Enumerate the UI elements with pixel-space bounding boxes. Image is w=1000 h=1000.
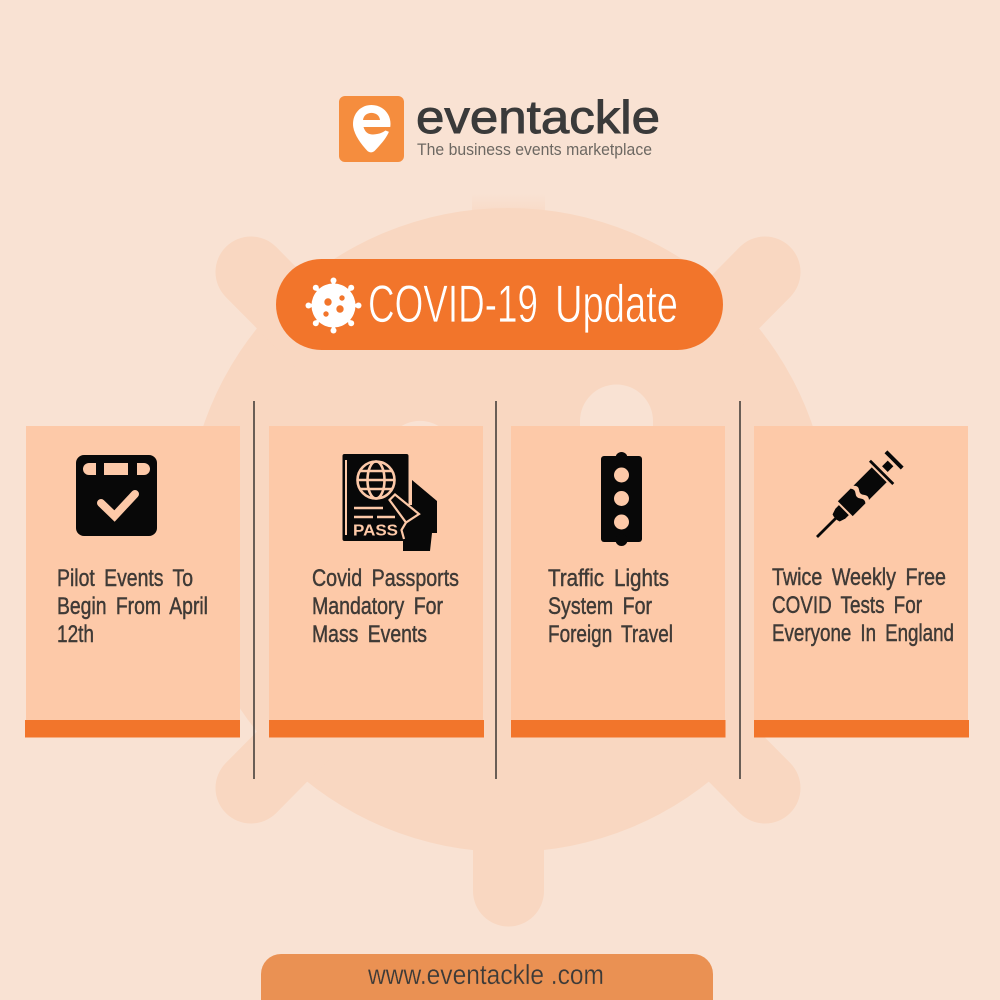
footer bar (261, 954, 713, 1000)
icon: calendar check (76, 455, 157, 536)
panel text: Traffic Lights (548, 565, 669, 592)
panel text: Foreign Travel (548, 621, 673, 648)
divider lines (254, 401, 740, 779)
title pill (276, 259, 723, 350)
panel text (548, 565, 673, 648)
panel: free tests (754, 426, 969, 738)
logo wordmark: eventackle (416, 91, 660, 143)
logo icon (339, 96, 404, 162)
title text: Update (555, 275, 678, 334)
icon: passport in hand: PASS (353, 522, 398, 540)
logo (339, 91, 660, 162)
icon: virus (306, 278, 362, 334)
panel: covid passports (269, 426, 484, 738)
background virus watermark (186, 194, 830, 891)
panel text: 12th (57, 621, 94, 648)
panel text: Covid Passports (312, 565, 459, 592)
website url: www.eventackle .com (367, 959, 604, 990)
icon: syringe (805, 447, 907, 549)
panel: pilot events (25, 426, 240, 738)
panel text (772, 564, 954, 647)
panel text (312, 565, 459, 648)
logo tagline: The business events marketplace (417, 140, 652, 159)
title text: COVID-19 (368, 275, 538, 334)
panel text: Mass Events (312, 621, 427, 648)
icon: traffic light (601, 452, 642, 546)
panel: traffic lights (511, 426, 726, 738)
panel text: COVID Tests For (772, 592, 922, 619)
panel text: Mandatory For (312, 593, 443, 620)
panel text: Begin From April (57, 593, 208, 620)
panel text: Twice Weekly Free (772, 564, 946, 591)
icon: passport in hand (342, 454, 437, 551)
panel text: System For (548, 593, 652, 620)
panel text (57, 565, 208, 648)
panel text: Pilot Events To (57, 565, 193, 592)
